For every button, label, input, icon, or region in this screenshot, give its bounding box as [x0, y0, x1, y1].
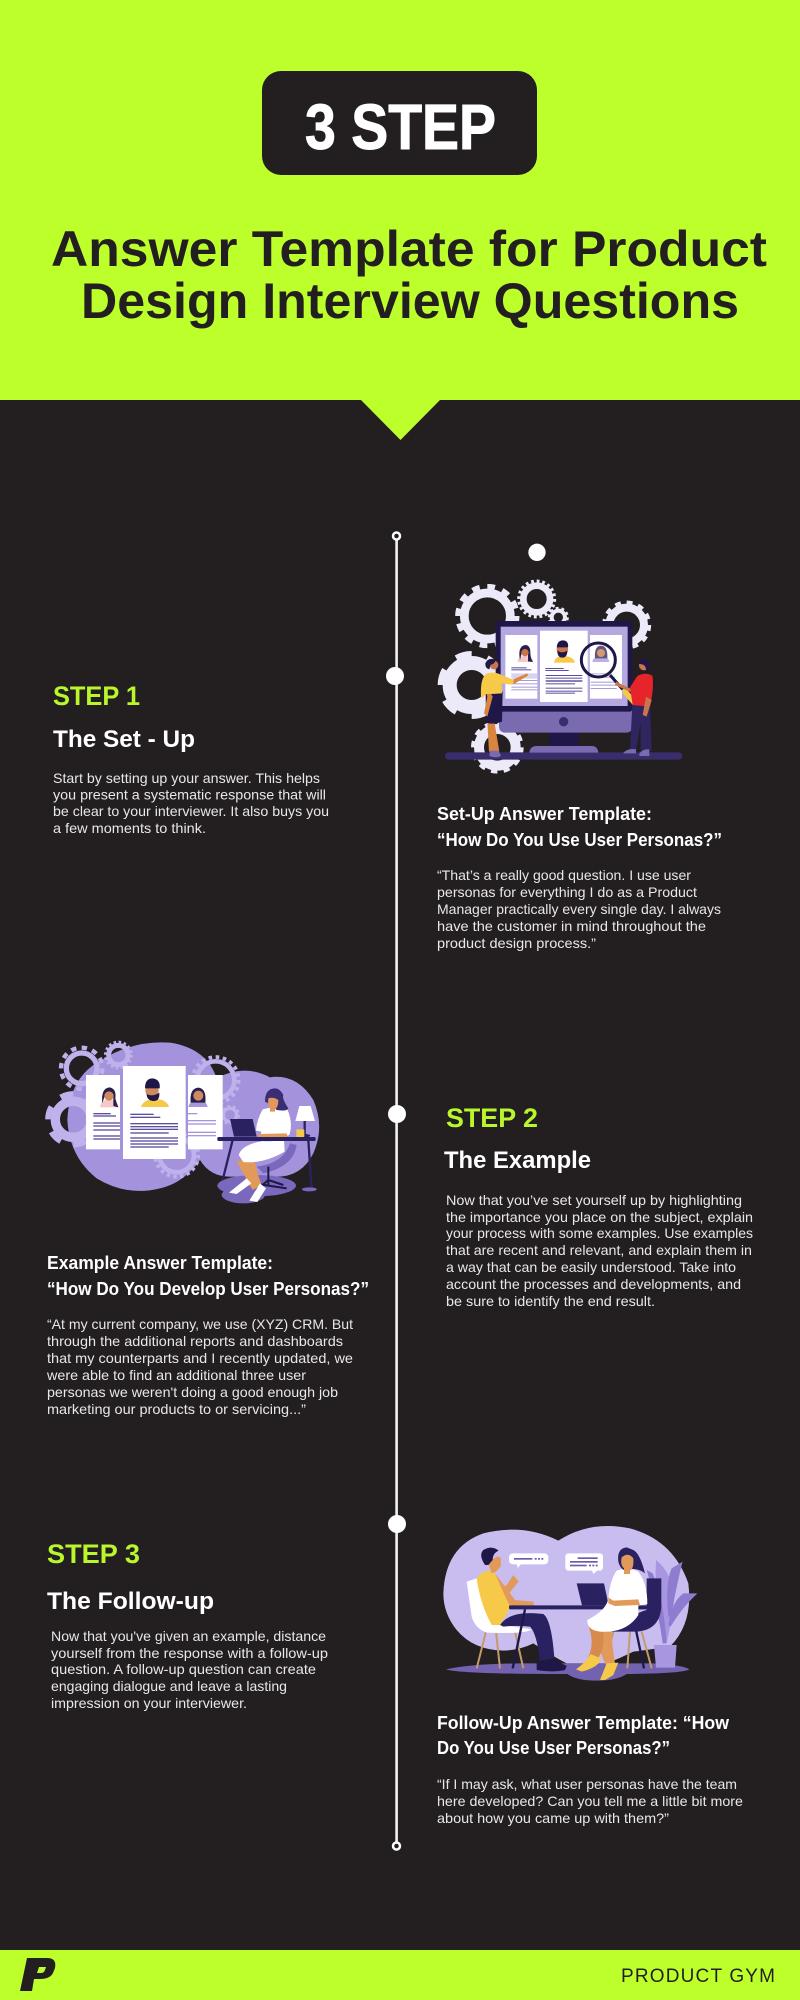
- arrow pointer: [361, 400, 440, 440]
- answer template 2: “At my current company, we use (XYZ) CRM. But: [47, 1317, 353, 1332]
- step 3 text block: yourself from the response with a follow-up: [51, 1646, 328, 1661]
- background blobs: [443, 1526, 689, 1663]
- step 2 text block: that are recent and relevant, and explain them in: [446, 1243, 752, 1258]
- answer template 3: here developed? Can you tell me a little bit more: [437, 1794, 743, 1809]
- timeline: [386, 532, 406, 1850]
- answer template 2: Example Answer Template:: [47, 1253, 273, 1273]
- table and laptop: [509, 1583, 648, 1668]
- step 2 text block: account the processes and developments, and: [446, 1277, 741, 1292]
- answer template 2: [46, 1253, 369, 1417]
- answer template 2: marketing our products to or servicing...”: [47, 1402, 306, 1417]
- answer template 1: Set-Up Answer Template:: [437, 804, 652, 824]
- step 3 text block: impression on your interviewer.: [51, 1696, 247, 1711]
- speech bubbles: [509, 1553, 603, 1574]
- step 2 text block: your process with some examples. Use examples: [446, 1226, 753, 1241]
- answer template 2: that my counterparts and I recently updated, we: [47, 1351, 353, 1366]
- step 2 text block: The Example: [444, 1147, 591, 1174]
- avatars: [517, 640, 609, 663]
- step 2 text block: a way that can be easily understood. Take into: [446, 1260, 736, 1275]
- man in yellow with chair: [467, 1548, 567, 1671]
- step 1 text block: The Set - Up: [53, 726, 195, 753]
- magnifying glass: [581, 643, 647, 717]
- persona cards: [86, 1066, 223, 1159]
- answer template 2: “How Do You Develop User Personas?”: [47, 1279, 369, 1299]
- step 1 text block: you present a systematic response that will: [53, 788, 326, 802]
- badge: 3 STEP: 3 STEP: [305, 91, 496, 163]
- answer template 1: “How Do You Use User Personas?”: [437, 830, 722, 850]
- woman at desk: [229, 1088, 297, 1202]
- footer band: [0, 1950, 800, 2000]
- document lines: [511, 667, 617, 694]
- answer template 1: Manager practically every single day. I always: [437, 902, 721, 917]
- step 3 text block: Now that you've given an example, distance: [51, 1629, 326, 1644]
- gears: [48, 1042, 239, 1177]
- step 3 text block: question. A follow-up question can create: [51, 1662, 316, 1677]
- step 3 text block: The Follow-up: [47, 1588, 214, 1615]
- illustration: woman at desk with persona cards: [48, 1042, 319, 1203]
- logo: P: [20, 1958, 55, 1991]
- step 1 text block: STEP 1: [53, 681, 140, 711]
- step 1 text block: Start by setting up your answer. This helps: [53, 771, 320, 786]
- plant: [647, 1560, 697, 1668]
- step 3 text block: engaging dialogue and leave a lasting: [51, 1679, 287, 1694]
- title: Answer Template for Product: [51, 221, 767, 277]
- woman in white with chair: [576, 1547, 661, 1680]
- answer template 1: personas for everything I do as a Product: [437, 885, 697, 900]
- step 2 text block: be sure to identify the end result.: [446, 1294, 655, 1309]
- answer template 3: about how you came up with them?”: [437, 1811, 669, 1826]
- step 2 text block: STEP 2: [446, 1103, 538, 1133]
- title: [51, 221, 767, 329]
- answer template 3: [437, 1713, 743, 1826]
- step 1 text block: be clear to your interviewer. It also buys you: [53, 804, 329, 819]
- answer template 1: “That’s a really good question. I use user: [437, 868, 691, 883]
- answer template 1: [437, 804, 722, 951]
- answer template 3: Follow-Up Answer Template: “How: [437, 1713, 730, 1733]
- badge: 3 STEP: [262, 71, 537, 175]
- illustration: persona review on monitor with gears: [441, 544, 682, 772]
- step 3 text block: STEP 3: [47, 1539, 140, 1569]
- step 2 text block: the importance you place on the subject, explain: [446, 1210, 753, 1225]
- floor: [446, 1663, 689, 1681]
- step 3 text block: [47, 1539, 328, 1711]
- answer template 2: personas we weren't doing a good enough job: [47, 1385, 338, 1400]
- title: Design Interview Questions: [81, 273, 739, 329]
- answer template 1: product design process.”: [437, 936, 596, 951]
- step 2 text block: Now that you’ve set yourself up by highlighting: [446, 1193, 742, 1208]
- desk, laptop and lamp: [217, 1106, 317, 1191]
- header panel: [0, 0, 800, 440]
- answer template 3: “If I may ask, what user personas have the team: [437, 1777, 737, 1792]
- brand name: PRODUCT GYM: [621, 1966, 775, 1987]
- answer template 2: were able to find an additional three user: [46, 1368, 306, 1383]
- answer template 3: Do You Use User Personas?”: [437, 1738, 670, 1758]
- background blobs: [67, 1042, 319, 1203]
- answer template 1: have the customer in mind throughout the: [437, 919, 706, 934]
- step 1 text block: [53, 681, 329, 836]
- illustration: two people in interview at table: [443, 1526, 697, 1681]
- answer template 2: through the additional reports and dashboards: [47, 1334, 343, 1349]
- woman in yellow: [481, 659, 528, 757]
- step 1 text block: a few moments to think.: [53, 821, 206, 836]
- man in red: [615, 659, 653, 756]
- step 2 text block: [444, 1103, 753, 1309]
